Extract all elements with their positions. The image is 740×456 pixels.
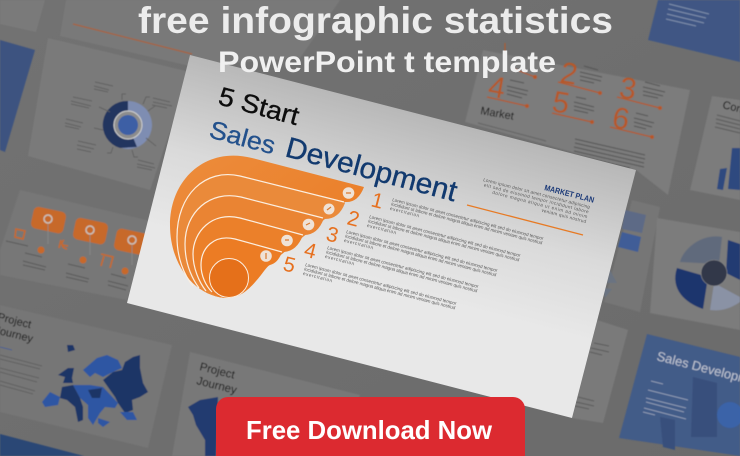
description 4: incididunt ut labore et dolore magna aliqua enim ad minim veniam quis nostrud: [326, 249, 478, 293]
panel: project journey slide 2: [172, 352, 360, 456]
panel: small tiles slide: [603, 200, 660, 312]
band 2: [177, 175, 345, 298]
description 3: exercitation: [343, 238, 374, 250]
heading: market plan: MARKET PLAN: [543, 183, 595, 205]
description 5: incididunt ut labore et dolore magna aliqua enim ad minim veniam quis nostrud: [304, 266, 456, 310]
card pins: [44, 215, 136, 265]
text lines: [643, 381, 688, 419]
market numbers: 4: [486, 70, 508, 106]
icon circles: [260, 187, 354, 262]
step numbers: 5: [281, 253, 298, 278]
diagram captions: [65, 82, 172, 170]
panel: bottom blue slide: [0, 434, 84, 456]
panel: contents slide: [690, 96, 740, 200]
heading: market: Market: [479, 105, 515, 123]
panel: top centre slide: [60, 0, 340, 66]
band 1: [170, 156, 364, 298]
tile: [622, 210, 646, 233]
panel: Europe map slide: [0, 305, 172, 448]
title: 5 Start: 5 Start: [215, 81, 303, 131]
button: free download now: Free Download Now: [246, 415, 493, 445]
market numbers: 6: [610, 101, 632, 137]
icon glyph marks: [266, 193, 351, 259]
panel: sales development slide: [619, 334, 740, 456]
heading: project journey: Journey: [195, 375, 238, 397]
panel: orange cards slide: [0, 190, 155, 300]
description 2: incididunt ut labore et dolore magna aliqua enim ad minim veniam quis nostrud: [368, 218, 520, 262]
pie chart: [675, 236, 740, 310]
step descriptions: [302, 197, 544, 315]
silhouette: [660, 377, 717, 450]
orange cards: [30, 206, 150, 274]
market numbers: 3: [617, 71, 639, 107]
step numbers: 1: [369, 189, 386, 214]
step numbers: 3: [324, 223, 341, 248]
band 3: [185, 196, 324, 298]
market plan block: [467, 177, 595, 235]
button: free download now: [216, 397, 525, 456]
description 1: exercitation: [389, 206, 420, 218]
main slide: [127, 55, 636, 418]
step numbers: [281, 189, 386, 278]
description 5: exercitation: [302, 271, 333, 283]
market captions: [478, 66, 665, 168]
panel: top left strip: [0, 0, 45, 32]
description 1: Lorem ipsum dolor sit amet consectetur adipiscing elit sed do eiusmod tempor: [392, 197, 544, 241]
description 5: Lorem ipsum dolor sit amet consectetur adipiscing elit sed do eiusmod tempor: [305, 262, 457, 306]
panel: market slide: [465, 43, 690, 195]
heading: project journey: [0, 311, 35, 345]
description 2: exercitation: [366, 223, 397, 235]
market lines: [487, 43, 661, 138]
panel: bottom right grey slide: [572, 320, 628, 423]
donut diagram: [103, 101, 152, 149]
description 3: incididunt ut labore et dolore magna aliqua enim ad minim veniam quis nostrud: [345, 233, 497, 277]
description 1: incididunt ut labore et dolore magna aliqua enim ad minim veniam quis nostrud: [391, 201, 543, 245]
subheading: PowerPoint template: PowerPoint t template: [218, 46, 556, 79]
orange divider top: [73, 24, 192, 54]
small pie: [717, 402, 740, 428]
market plan text: elit sed do eiusmod tempor incididunt labore: [483, 182, 590, 214]
market plan text: dolore magna aliqua ut enim ad minim: [492, 190, 588, 219]
tile: [618, 232, 641, 252]
funnel: concentric orange bands: [170, 156, 364, 298]
map: Europe: [42, 345, 148, 427]
heading: free infographic statistics: free infographic statistics: [138, 0, 613, 41]
description 2: Lorem ipsum dolor sit amet consectetur adipiscing elit sed do eiusmod tempor: [369, 214, 521, 258]
small shape: [607, 270, 617, 283]
market numbers: 2: [558, 56, 580, 92]
panel: pie chart slide: [650, 218, 740, 330]
market plan text: Lorem ipsum dolor sit amet consectetur adipiscing: [483, 177, 591, 210]
market plan text: [479, 177, 591, 224]
bar chart: [717, 148, 740, 190]
panel: blue slide left: [0, 40, 35, 152]
panel: blue slide top right: [648, 0, 740, 62]
step numbers: 2: [345, 207, 362, 232]
description 4: Lorem ipsum dolor sit amet consectetur adipiscing elit sed do eiusmod tempor: [327, 245, 479, 289]
market numbers: [486, 56, 639, 137]
description 3: Lorem ipsum dolor sit amet consectetur adipiscing elit sed do eiusmod tempor: [346, 229, 498, 273]
orange rule: [467, 205, 583, 235]
band 4: [193, 217, 303, 298]
centre circle: [210, 258, 248, 298]
map fragment: [188, 397, 218, 456]
market plan text: veniam quis nostrud: [541, 208, 587, 224]
text lines: [715, 115, 740, 133]
text lines: [0, 347, 42, 394]
panel: circular diagram slide: [28, 24, 192, 190]
small orange icons: [15, 229, 113, 268]
small shape: [603, 288, 612, 298]
step numbers: 4: [302, 239, 319, 264]
white separators: [177, 175, 344, 292]
market numbers: 5: [550, 85, 572, 121]
title: Development: Development: [282, 132, 460, 208]
description 4: exercitation: [324, 254, 355, 266]
heading: project journey: Project: [198, 361, 237, 382]
title: Sales: Sales: [206, 116, 278, 160]
heading: project journey: [195, 361, 238, 397]
band 5: [201, 238, 282, 298]
card captions: [6, 241, 128, 290]
